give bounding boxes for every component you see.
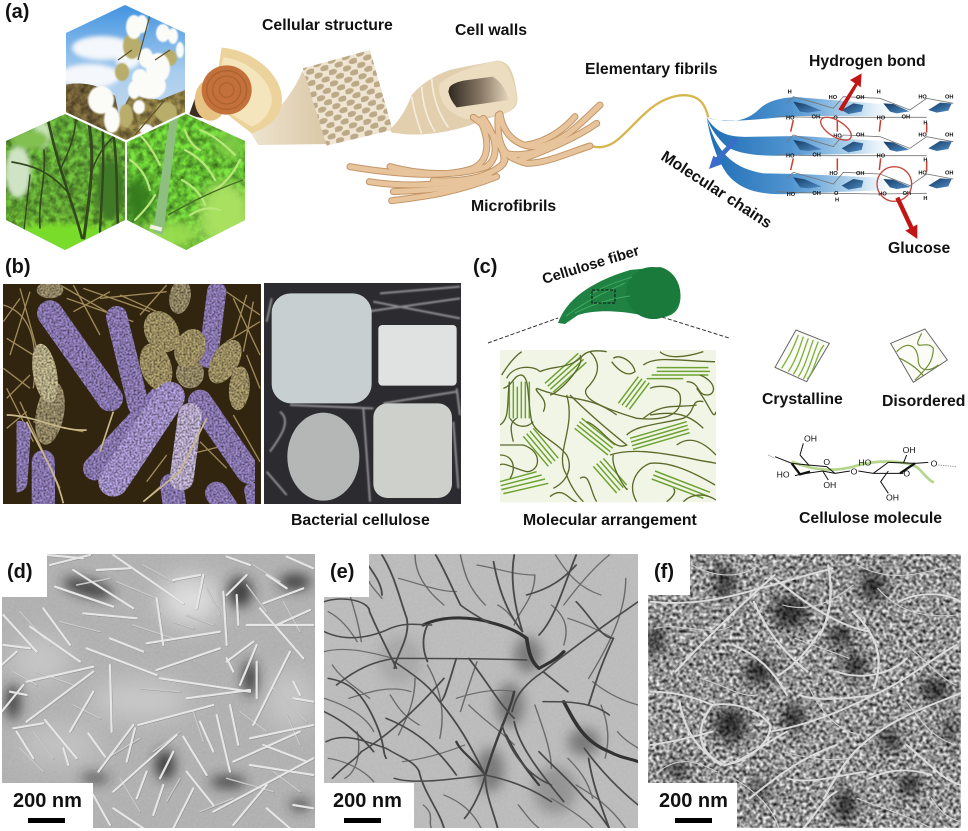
atom labels: OH	[812, 114, 820, 120]
arrow: hydrogen bond	[838, 73, 862, 111]
photo: cellulose sheets	[264, 283, 461, 504]
atom labels: H	[788, 89, 792, 95]
icon: wood log and honeycomb	[189, 48, 393, 146]
atom labels: HO	[829, 95, 838, 101]
atom labels: H	[835, 198, 839, 204]
labels for panel a: Glucose	[888, 240, 951, 257]
atom labels: OH	[812, 191, 821, 197]
micrograph: network	[324, 554, 638, 828]
red circle callouts	[817, 113, 912, 201]
caption: disordered: Disordered	[882, 393, 965, 410]
dashed zoom lines	[488, 317, 729, 343]
caption: crystalline: Crystalline	[762, 391, 843, 408]
caption: bacterial cellulose: Bacterial cellulose	[291, 512, 430, 529]
chemical structure: cellulose molecule: OH	[823, 480, 836, 490]
atom labels: HO	[877, 115, 886, 121]
atom labels: H	[923, 158, 927, 164]
atom labels: HO	[918, 170, 927, 176]
atom labels: HO	[878, 192, 887, 198]
label (e)	[320, 552, 369, 597]
atom labels: HO	[918, 133, 927, 139]
arrow: glucose	[895, 197, 917, 239]
icon: green fiber	[558, 263, 684, 324]
label (a): (a)	[5, 1, 29, 23]
label (d)	[0, 552, 47, 597]
caption: cellulose fiber: Cellulose fiber	[540, 243, 642, 288]
atom labels: OH	[945, 133, 953, 139]
hexagon dividers	[66, 113, 185, 220]
chemical structure: cellulose molecule: O	[851, 466, 858, 476]
chemical structure: cellulose molecule: HO	[777, 470, 790, 480]
blue ribbons	[707, 97, 893, 121]
atom labels: H	[923, 120, 927, 126]
labels for panel a: Cell walls	[455, 22, 527, 39]
scale bar e: 200 nm	[333, 790, 402, 812]
atom labels: HO	[786, 115, 795, 121]
panel a: cellulose hierarchy	[0, 0, 953, 257]
photo: forest hexagon	[6, 114, 125, 250]
chemical structure: cellulose molecule: OH	[886, 492, 899, 502]
amorphous chains	[500, 351, 716, 502]
label (f)	[644, 552, 690, 595]
elementary fibril strand	[593, 95, 708, 147]
scale bar d	[0, 783, 93, 831]
labels for panel a: Microfibrils	[471, 198, 556, 215]
labels for panel a	[262, 17, 951, 257]
atom labels: HO	[787, 192, 796, 198]
atom labels	[786, 89, 953, 204]
atom labels: OH	[812, 153, 821, 159]
labels for panel a: Cellular structure	[262, 17, 393, 34]
wood cross section	[213, 48, 282, 133]
chemical structure: cellulose molecule: OH	[804, 433, 817, 443]
chemical structure: cellulose molecule: O	[931, 459, 938, 469]
molecular arrangement diagram	[500, 350, 716, 502]
scale bar d: 200 nm	[13, 790, 82, 812]
panel c: cellulose fiber	[473, 243, 965, 529]
atom labels: O	[833, 115, 838, 121]
atom labels: OH	[945, 94, 953, 100]
scale bar e	[320, 783, 414, 831]
panel d: CNC TEM image	[0, 552, 315, 831]
atom labels: OH	[902, 114, 910, 120]
atom labels: H	[877, 89, 881, 95]
label (f): (f)	[654, 561, 674, 583]
label (c): (c)	[473, 256, 497, 278]
atom labels: OH	[856, 133, 864, 139]
atom labels: HO	[829, 171, 838, 177]
atom labels: HO	[877, 153, 886, 159]
icon: disordered block	[891, 329, 947, 382]
chemical structure: cellulose molecule: O	[903, 469, 910, 479]
atom labels: HO	[833, 133, 842, 139]
label (d): (d)	[7, 561, 33, 583]
bond skeleton	[775, 97, 953, 194]
atom labels: H	[923, 196, 927, 202]
chemical structure: cellulose molecule: OH	[903, 445, 916, 455]
glucose rings row 1	[793, 102, 952, 114]
atom labels: OH	[856, 171, 864, 177]
chemical structure: cellulose molecule	[768, 433, 957, 502]
photo: bamboo hexagon	[127, 114, 245, 250]
atom labels: OH	[856, 95, 864, 101]
atom labels: HO	[918, 94, 927, 100]
photo: bacteria micrograph	[3, 278, 261, 508]
micrograph: needles	[2, 554, 315, 828]
labels for panel a: Molecular chains	[658, 148, 775, 232]
glucose rings row 3	[793, 177, 952, 190]
atom labels: OH	[903, 191, 911, 197]
caption: cellulose molecule: Cellulose molecule	[799, 510, 942, 527]
cone toward cellular block	[250, 71, 328, 145]
label (e): (e)	[330, 561, 354, 583]
arrow: molecular chains	[709, 137, 738, 169]
icon: cell wall tube and microfibrils	[350, 61, 600, 201]
label (b): (b)	[5, 256, 31, 278]
caption: molecular arrangement: Molecular arrangement	[523, 512, 698, 529]
crystalline bundles	[500, 353, 710, 498]
panel b: bacterial cellulose	[3, 256, 461, 529]
chemical structure: cellulose molecule: HO	[858, 458, 872, 468]
atom labels: O	[834, 191, 839, 197]
labels for panel a: Elementary fibrils	[585, 61, 718, 78]
molecular chains diagram	[593, 73, 953, 239]
atom labels: HO	[786, 153, 795, 159]
micrograph: fiber mesh	[647, 554, 965, 828]
hydrogen bonds	[791, 120, 927, 172]
icon: crystalline block	[775, 330, 829, 382]
scale bar f: 200 nm	[659, 790, 728, 812]
photo: cotton hexagon	[66, 5, 185, 140]
scale bar f	[644, 783, 737, 831]
glucose rings row 2	[793, 140, 952, 152]
labels for panel a: Hydrogen bond	[809, 53, 926, 70]
chemical structure: cellulose molecule: O	[823, 457, 830, 467]
atom labels: OH	[945, 170, 953, 176]
panel f: BC SEM image	[644, 552, 965, 831]
honeycomb block	[303, 50, 393, 146]
panel e: CNF TEM image	[320, 552, 638, 831]
microfibril bundles	[350, 105, 600, 201]
